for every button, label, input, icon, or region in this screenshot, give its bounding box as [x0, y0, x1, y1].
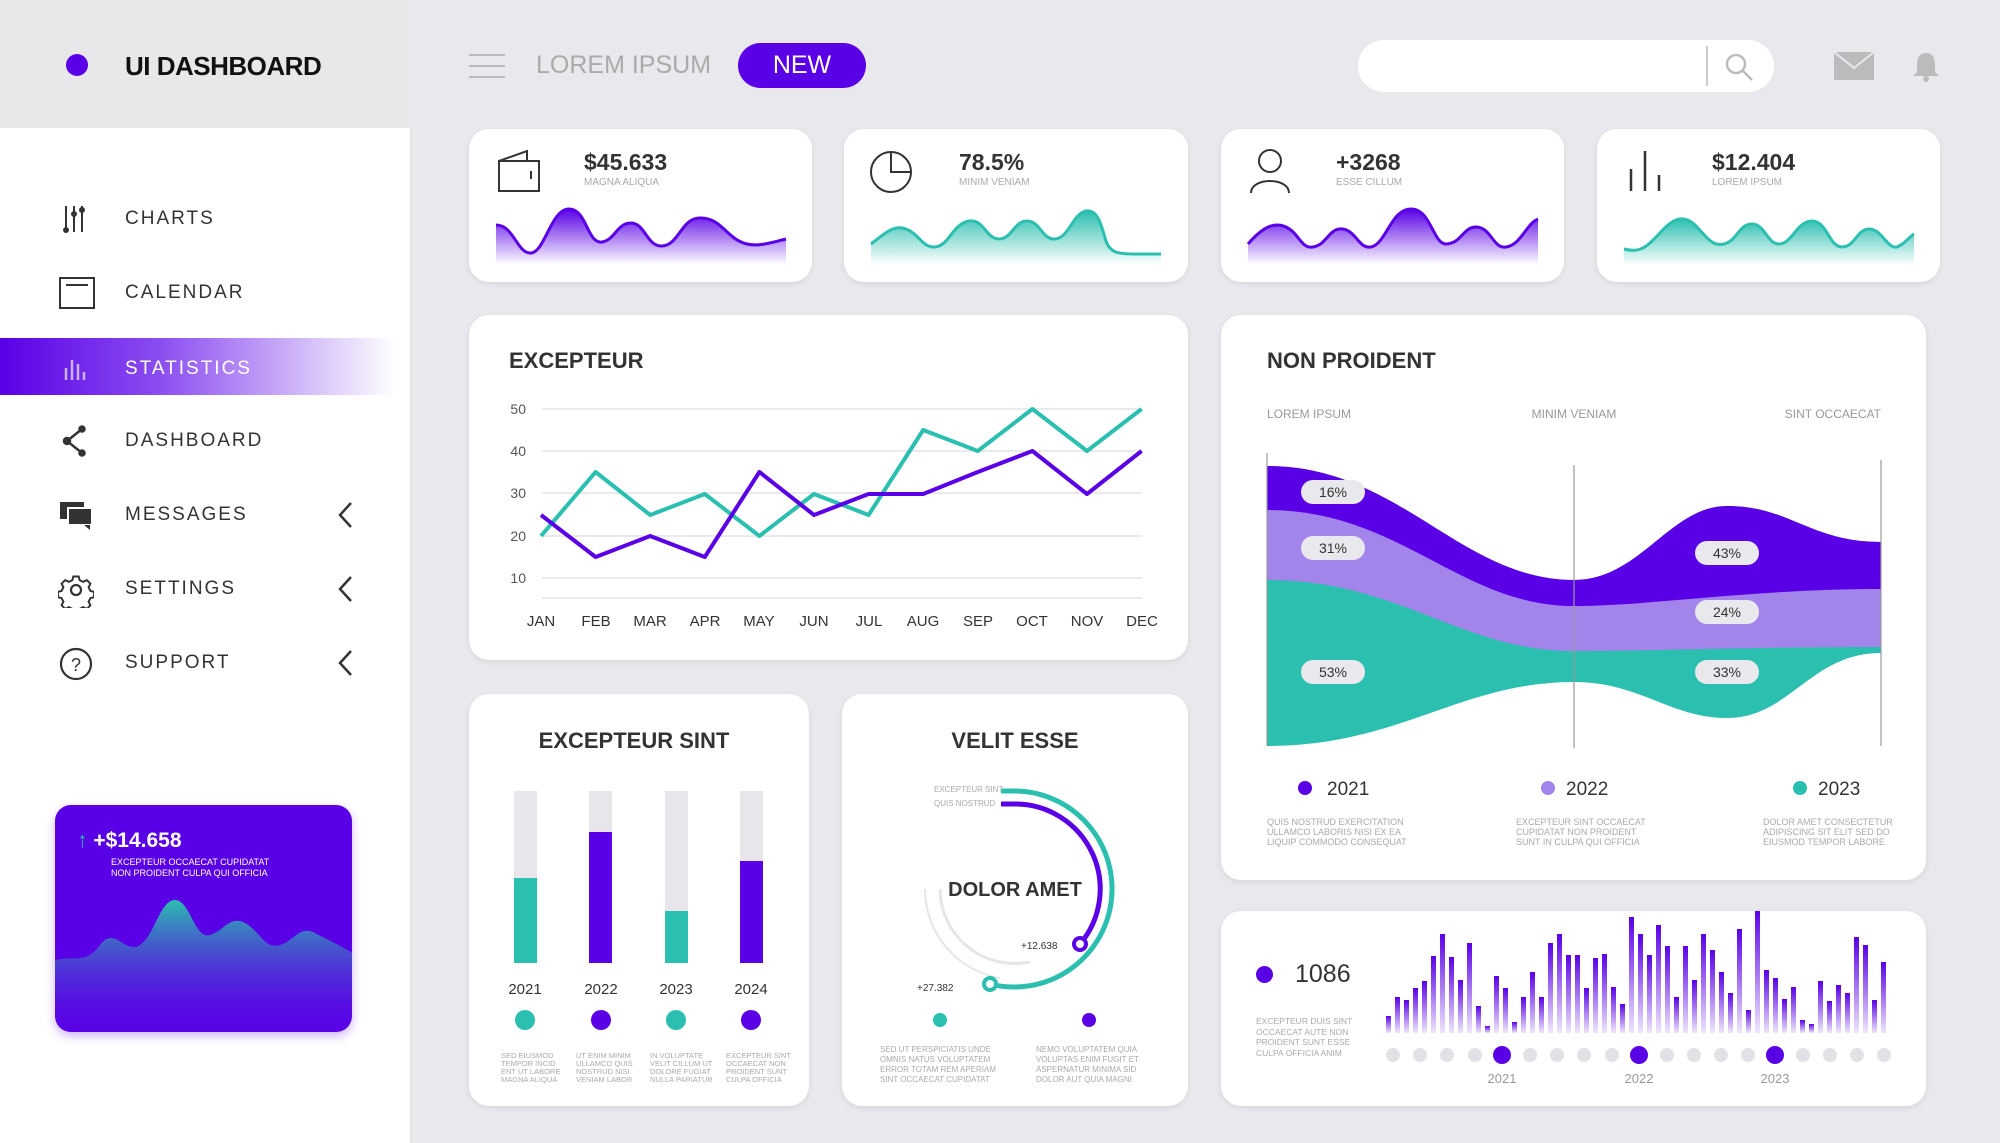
- stream chart: 43%: [1713, 545, 1741, 561]
- menu: messages: MESSAGES: [125, 504, 248, 525]
- radial chart: OMNIS NATUS VOLUPTATEM: [880, 1055, 991, 1064]
- line chart: JUL: [856, 613, 882, 630]
- menu: settings: [58, 576, 352, 608]
- menu: messages: [60, 502, 352, 530]
- radial chart: DOLOR AUT QUIA MAGNI: [1036, 1075, 1132, 1084]
- stat card 3: ESSE CILLUM: [1336, 177, 1402, 188]
- bar chart: MAGNA ALIQUA: [501, 1075, 557, 1084]
- menu: dashboard: DASHBOARD: [125, 430, 263, 451]
- panel: excepteur sint bar chart: [469, 694, 809, 1106]
- line chart: JUN: [799, 613, 829, 630]
- bar chart: 2022: [1625, 1071, 1653, 1086]
- line chart: [510, 401, 1158, 630]
- line chart: AUG: [907, 613, 939, 630]
- bar chart: 2021: [508, 981, 542, 998]
- bar chart: 2021: [1488, 1071, 1516, 1086]
- line chart: OCT: [1016, 613, 1048, 630]
- stat card 4: $12.404: [1712, 149, 1795, 175]
- description: [1256, 1016, 1352, 1058]
- stat card 2: 78.5%: [959, 149, 1024, 175]
- line chart: 20: [510, 528, 526, 544]
- line chart: SEP: [963, 613, 993, 630]
- menu: statistics active: STATISTICS: [125, 358, 252, 379]
- radial chart: [880, 785, 1139, 1084]
- radial chart: +12.638: [1021, 941, 1058, 952]
- bar chart: VELIT CILLUM UT: [650, 1059, 713, 1068]
- line chart: JAN: [527, 613, 555, 630]
- new button: [738, 43, 866, 88]
- bar chart: IN VOLUPTATE: [650, 1051, 703, 1060]
- sidebar: [0, 0, 411, 1143]
- value: 1086: [1295, 960, 1351, 988]
- radial chart: SED UT PERSPICIATIS UNDE: [880, 1045, 991, 1054]
- bar chart: PROIDENT SUNT: [726, 1067, 788, 1076]
- description: EXCEPTEUR DUIS SINT: [1256, 1016, 1352, 1026]
- line chart: 40: [510, 443, 526, 459]
- bar chart: 2024: [734, 981, 768, 998]
- promo text: [111, 857, 270, 878]
- stream chart: 2022: [1566, 779, 1608, 800]
- radial chart: VOLUPTAS ENIM FUGIT ET: [1036, 1055, 1139, 1064]
- stat card 2: [844, 129, 1188, 282]
- menu: dashboard: [62, 425, 263, 457]
- description: OCCAECAT AUTE NON: [1256, 1026, 1348, 1036]
- stream chart: 16%: [1319, 484, 1347, 500]
- heading: NON PROIDENT: [1267, 348, 1436, 373]
- line chart: FEB: [581, 613, 611, 630]
- radial chart: EXCEPTEUR SINT: [934, 785, 1003, 794]
- bar chart: SED EIUSMOD: [501, 1051, 554, 1060]
- stream chart: QUIS NOSTRUD EXERCITATION: [1267, 817, 1404, 827]
- new button: NEW: [773, 51, 831, 79]
- bar chart: CULPA OFFICIA: [726, 1075, 782, 1084]
- promo text: NON PROIDENT CULPA QUI OFFICIA: [111, 868, 268, 878]
- stat card 1: MAGNA ALIQUA: [584, 177, 659, 188]
- stat card 2: MINIM VENIAM: [959, 177, 1030, 188]
- bar chart: [501, 791, 791, 1084]
- menu: charts: CHARTS: [125, 208, 215, 229]
- stream chart: SINT OCCAECAT: [1785, 407, 1882, 421]
- stream chart: 33%: [1713, 664, 1741, 680]
- top bar title: LOREM IPSUM: [536, 51, 711, 79]
- panel: velit esse radial: [842, 694, 1188, 1106]
- bar chart: [1386, 911, 1891, 1086]
- stream chart: 2023: [1818, 779, 1860, 800]
- bar chart: OCCAECAT NON: [726, 1059, 786, 1068]
- stream chart: 24%: [1713, 604, 1741, 620]
- menu: calendar: [59, 277, 244, 309]
- menu: support: SUPPORT: [125, 652, 231, 673]
- bar chart: 2022: [584, 981, 618, 998]
- menu: charts: [63, 206, 215, 233]
- description: CULPA OFFICIA ANIM: [1256, 1048, 1342, 1058]
- search box: [1358, 40, 1774, 92]
- line chart: 10: [510, 570, 526, 586]
- bar chart: DOLORE FUGIAT: [650, 1067, 711, 1076]
- radial chart: ERROR TOTAM REM APERIAM: [880, 1065, 996, 1074]
- line chart: DEC: [1126, 613, 1158, 630]
- radial chart: SINT OCCAECAT CUPIDATAT: [880, 1075, 990, 1084]
- stream chart: 31%: [1319, 540, 1347, 556]
- logo text: UI DASHBOARD: [125, 51, 321, 81]
- line chart: MAY: [743, 613, 775, 630]
- dot: [1256, 966, 1273, 983]
- bar chart: NOSTRUD NISI: [576, 1067, 630, 1076]
- line chart: MAR: [633, 613, 667, 630]
- stat card 1: $45.633: [584, 149, 667, 175]
- bar chart: ENT UT LABORE: [501, 1067, 560, 1076]
- panel: 1086 bar timeline: [1221, 911, 1926, 1106]
- bar chart: EXCEPTEUR SINT: [726, 1051, 791, 1060]
- logo dot: [66, 54, 88, 76]
- top bar: hamburger: [469, 54, 505, 78]
- heading: EXCEPTEUR: [509, 348, 643, 373]
- stream chart: LIQUIP COMMODO CONSEQUAT: [1267, 837, 1407, 847]
- heading: EXCEPTEUR SINT: [539, 728, 729, 753]
- promo text: EXCEPTEUR OCCAECAT CUPIDATAT: [111, 857, 269, 867]
- stream chart: MINIM VENIAM: [1532, 407, 1616, 421]
- menu: calendar: CALENDAR: [125, 282, 244, 303]
- heading: VELIT ESSE: [951, 728, 1079, 753]
- radial chart: DOLOR AMET: [948, 879, 1082, 901]
- radial chart: +27.382: [917, 983, 954, 994]
- stat card 4: LOREM IPSUM: [1712, 177, 1782, 188]
- stream chart: ULLAMCO LABORIS NISI EX EA: [1267, 827, 1401, 837]
- stream chart: 53%: [1319, 664, 1347, 680]
- panel: non proident stream chart: [1221, 315, 1926, 880]
- promo wave: [55, 900, 352, 1032]
- menu: settings: SETTINGS: [125, 578, 236, 599]
- promo value: ↑ +$14.658: [77, 829, 182, 852]
- stream chart: CUPIDATAT NON PROIDENT: [1516, 827, 1637, 837]
- stat card 1: [469, 129, 812, 282]
- stream chart: EIUSMOD TEMPOR LABORE: [1763, 837, 1885, 847]
- bar chart: UT ENIM MINIM: [576, 1051, 631, 1060]
- bar chart: 2023: [659, 981, 693, 998]
- sidebar header: [0, 0, 411, 128]
- stream chart: ADIPISCING SIT ELIT SED DO: [1763, 827, 1890, 837]
- bar chart: TEMPOR INCID: [501, 1059, 556, 1068]
- radial chart: ASPERNATUR MINIMA SID: [1036, 1065, 1137, 1074]
- radial chart: NEMO VOLUPTATEM QUIA: [1036, 1045, 1138, 1054]
- bar chart: 2023: [1761, 1071, 1789, 1086]
- line chart: 50: [510, 401, 526, 417]
- line chart: 30: [510, 485, 526, 501]
- radial chart: QUIS NOSTRUD: [934, 799, 996, 808]
- icon: mail: [1834, 52, 1874, 80]
- bar chart: VENIAM LABOR: [576, 1075, 633, 1084]
- icon: bell: [1913, 53, 1939, 82]
- bar chart: NULLA PARIATUR: [650, 1075, 713, 1084]
- line chart: NOV: [1071, 613, 1103, 630]
- stream chart: DOLOR AMET CONSECTETUR: [1763, 817, 1893, 827]
- description: PROIDENT SUNT ESSE: [1256, 1037, 1350, 1047]
- panel: excepteur line chart: [469, 315, 1188, 660]
- stream chart: LOREM IPSUM: [1267, 407, 1351, 421]
- stat card 4: [1597, 129, 1940, 282]
- stream chart: [1266, 407, 1893, 847]
- menu: support: ?: [71, 655, 81, 675]
- menu: statistics active: [0, 338, 395, 395]
- bar chart: ULLAMCO QUIS: [576, 1059, 633, 1068]
- stream chart: EXCEPTEUR SINT OCCAECAT: [1516, 817, 1646, 827]
- stream chart: 2021: [1327, 779, 1369, 800]
- promo card: [55, 805, 352, 1032]
- stat card 3: [1221, 129, 1564, 282]
- stat card 3: +3268: [1336, 149, 1401, 175]
- line chart: APR: [690, 613, 721, 630]
- stream chart: SUNT IN CULPA QUI OFFICIA: [1516, 837, 1640, 847]
- menu: support: [60, 648, 352, 680]
